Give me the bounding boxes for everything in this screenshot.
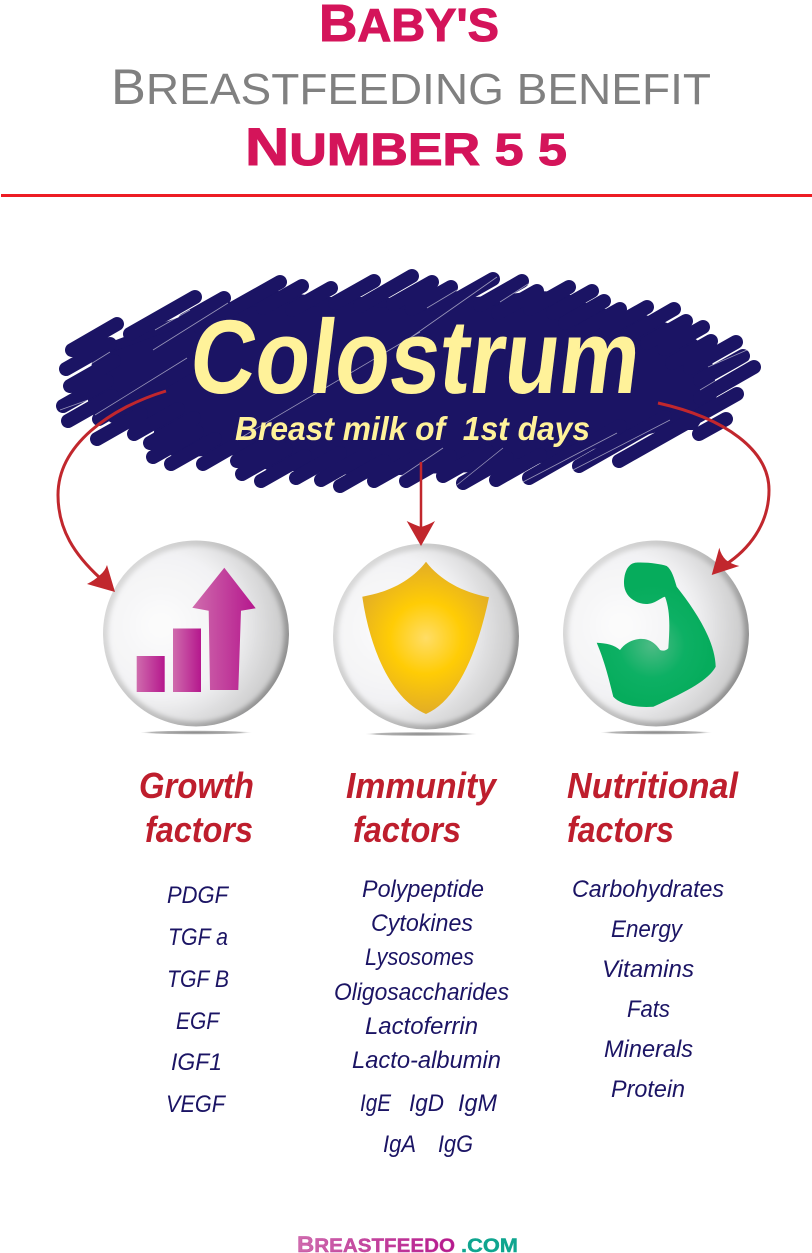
scribble gap lines [60, 277, 750, 485]
heading: growth factors [139, 765, 254, 850]
title line: Breastfeeding benefit: BREASTFEEDING BENEFIT [111, 59, 711, 115]
icon: flexed arm [597, 563, 716, 707]
heading: immunity factors [346, 765, 498, 850]
list: growth factors: TGF B [167, 966, 229, 993]
sphere: nutrition icon [563, 540, 749, 734]
arrow: to immunity [407, 462, 435, 546]
list: growth factors [166, 882, 229, 1118]
heading: immunity factors: Immunity [346, 765, 498, 806]
arrow: to nutrition [658, 403, 769, 575]
list: immunity factors: Lactoferrin [365, 1013, 478, 1040]
arrow: to growth [58, 391, 166, 592]
heading: immunity factors: factors [353, 809, 461, 850]
list: growth factors: TGF a [168, 924, 228, 951]
sphere: immunity icon [333, 544, 519, 736]
heading: growth factors: Growth [139, 765, 254, 806]
list: growth factors: VEGF [166, 1091, 226, 1118]
list: nutritional factors [572, 876, 724, 1103]
list: immunity factors: IgA [383, 1131, 416, 1158]
icon: rising bars and arrow [137, 568, 256, 692]
icon: shield [362, 562, 489, 714]
list: nutritional factors: Protein [611, 1076, 685, 1103]
footer: website [297, 1232, 518, 1253]
banner title: Colostrum: Colostrum [184, 299, 647, 416]
list: immunity factors: Lacto-albumin [352, 1047, 501, 1074]
list: immunity factors: Cytokines [371, 910, 473, 937]
list: immunity factors: IgE [360, 1090, 392, 1117]
list: immunity factors: Polypeptide [362, 876, 484, 903]
colostrum scribble banner [60, 276, 754, 486]
title [111, 0, 711, 177]
heading: nutritional factors [567, 765, 739, 850]
list: immunity factors: IgG [438, 1131, 473, 1158]
list: growth factors: IGF1 [171, 1049, 222, 1076]
scribble shape [63, 276, 754, 486]
list: nutritional factors: Energy [611, 916, 684, 943]
list: immunity factors: Lysosomes [365, 944, 474, 971]
list: nutritional factors: Minerals [604, 1036, 693, 1063]
list: growth factors: PDGF [167, 882, 229, 909]
list: immunity factors: IgM [458, 1090, 497, 1117]
heading: growth factors: factors [145, 809, 253, 850]
heading: nutritional factors: Nutritional [567, 765, 739, 806]
list: nutritional factors: Vitamins [602, 956, 694, 983]
list: growth factors: EGF [176, 1008, 220, 1035]
sphere: growth icon [103, 540, 289, 734]
list: immunity factors: Oligosaccharides [334, 979, 509, 1006]
list: nutritional factors: Carbohydrates [572, 876, 724, 903]
list: nutritional factors: Fats [627, 996, 670, 1023]
title line: Number 55: NUMBER 5 5 [245, 118, 567, 177]
banner subtitle: Breast milk of 1st days [235, 410, 590, 447]
heading: nutritional factors: factors [567, 809, 674, 850]
list: immunity factors: IgD [409, 1090, 444, 1117]
list: immunity factors [334, 876, 509, 1158]
